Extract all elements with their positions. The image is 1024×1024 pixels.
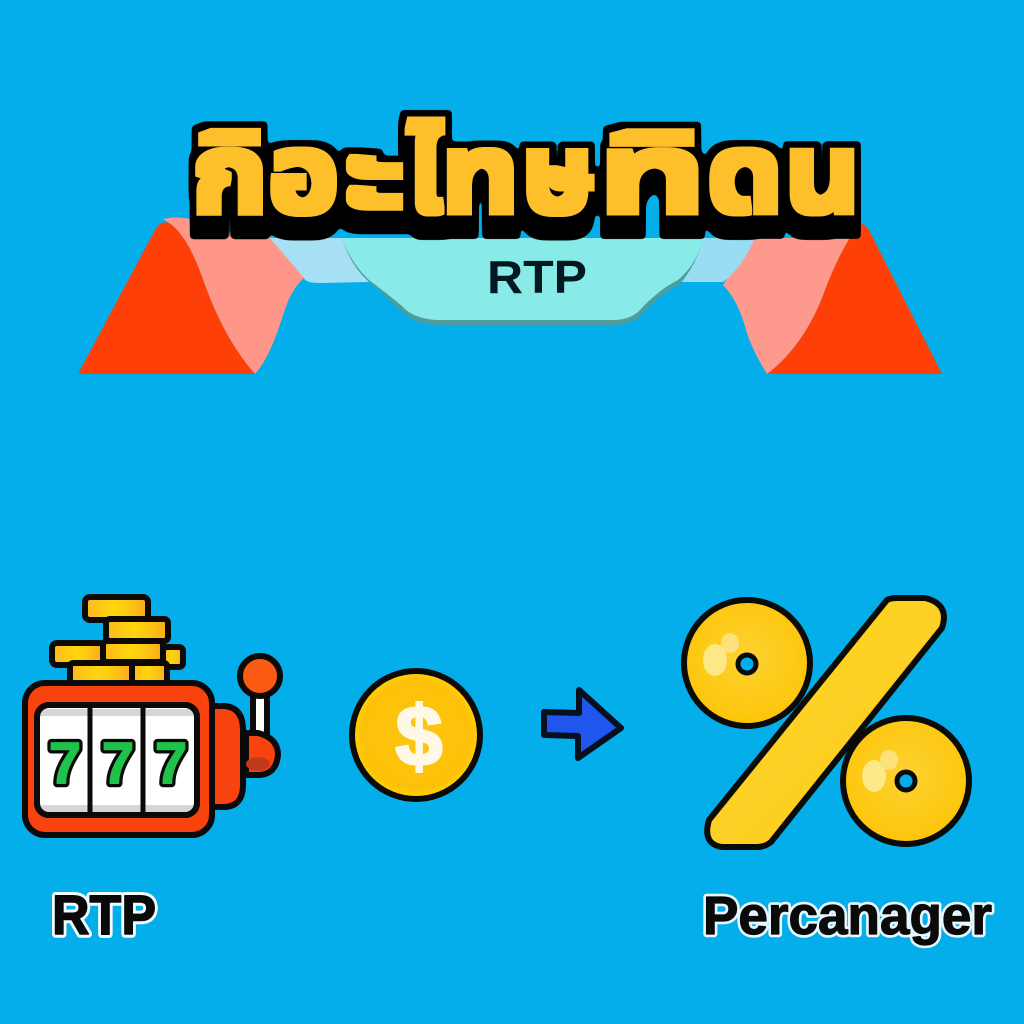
plaque label: RTP [487, 251, 587, 303]
bottom circle [843, 718, 969, 844]
left light blue strip [270, 238, 370, 283]
sevens fill: 7 [102, 731, 134, 796]
bridge illustration [78, 218, 942, 374]
label: Percanager: Percanager [703, 886, 992, 946]
machine body [25, 683, 212, 835]
top circle highlight and hole [703, 633, 756, 676]
sevens fill: 7 [155, 731, 187, 796]
left pink slope [163, 218, 304, 374]
right pink slope [723, 226, 858, 374]
title: ทิ [597, 95, 707, 262]
title: ไ [408, 95, 443, 262]
title: ด [707, 95, 783, 262]
top circle [684, 600, 810, 726]
sevens: 7 [155, 731, 187, 796]
sevens [49, 731, 187, 796]
icon: slot machine with coins [25, 597, 280, 835]
side box [212, 706, 243, 807]
central teal plaque [342, 238, 704, 325]
lever knob and stick [253, 694, 267, 736]
title: น [785, 95, 860, 262]
title [192, 95, 860, 262]
label: RTP: RTP [52, 883, 156, 946]
reel window [37, 705, 197, 815]
title: กิ [192, 95, 268, 262]
icon: dollar coin [352, 671, 480, 799]
title: อ [268, 95, 339, 262]
lever base [246, 733, 278, 775]
label: Percanager: Percanager [703, 886, 992, 946]
percent slash [707, 598, 944, 847]
icon: dollar coin: $ [396, 689, 442, 783]
sevens: 7 [49, 731, 81, 796]
title: ะ [342, 95, 408, 262]
right red mountain [767, 224, 942, 374]
title: ษ [522, 95, 595, 262]
label: RTP: RTP [52, 883, 156, 946]
title: ท [441, 95, 519, 262]
left red mountain [78, 222, 255, 374]
sevens fill: 7 [49, 731, 81, 796]
sevens: 7 [102, 731, 134, 796]
icon: percent sign [684, 598, 969, 847]
right light blue strip [678, 238, 755, 282]
arrow [544, 690, 621, 758]
bottom circle highlight and hole [862, 750, 915, 792]
coin stack [52, 597, 183, 687]
sevens fill [49, 731, 187, 796]
